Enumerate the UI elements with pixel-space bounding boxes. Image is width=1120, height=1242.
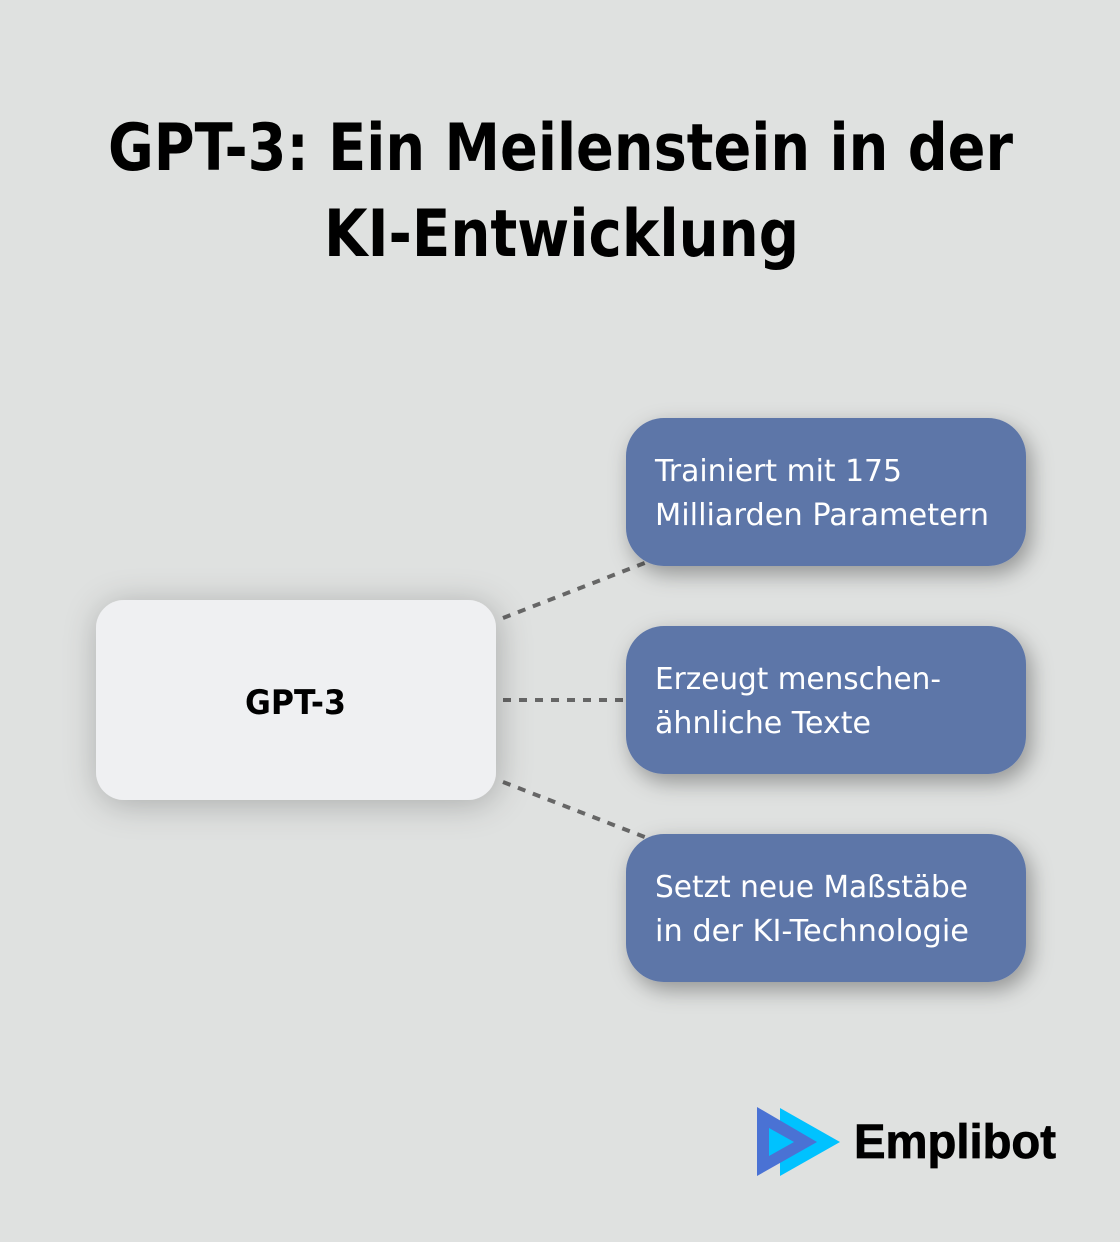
panel: GPT-3: GPT-3 (245, 683, 346, 723)
panel: fact 3: in der KI-Technologie (655, 914, 969, 949)
panel: fact 3 (626, 834, 1026, 982)
panel: fact 1 (626, 418, 1026, 566)
panel: GPT-3 (96, 600, 496, 800)
connector: GPT-3 to third fact (503, 782, 660, 843)
title (108, 111, 1013, 272)
panel: fact 1: Milliarden Parametern (655, 498, 989, 533)
panel: fact 1: Trainiert mit 175 (654, 454, 902, 489)
logo: Emplibot: Emplibot (854, 1116, 1056, 1169)
panel: fact 2 (626, 626, 1026, 774)
connector: GPT-3 to first fact (503, 557, 660, 618)
panel: fact 2: Erzeugt menschen- (655, 662, 941, 697)
logo: Emplibot (757, 1107, 1056, 1176)
panel: fact 2: ähnliche Texte (655, 706, 871, 741)
connector: GPT-3 to second fact (503, 698, 626, 702)
panel: fact 3: Setzt neue Maßstäbe (655, 870, 968, 905)
title: KI-Entwicklung (324, 197, 799, 272)
